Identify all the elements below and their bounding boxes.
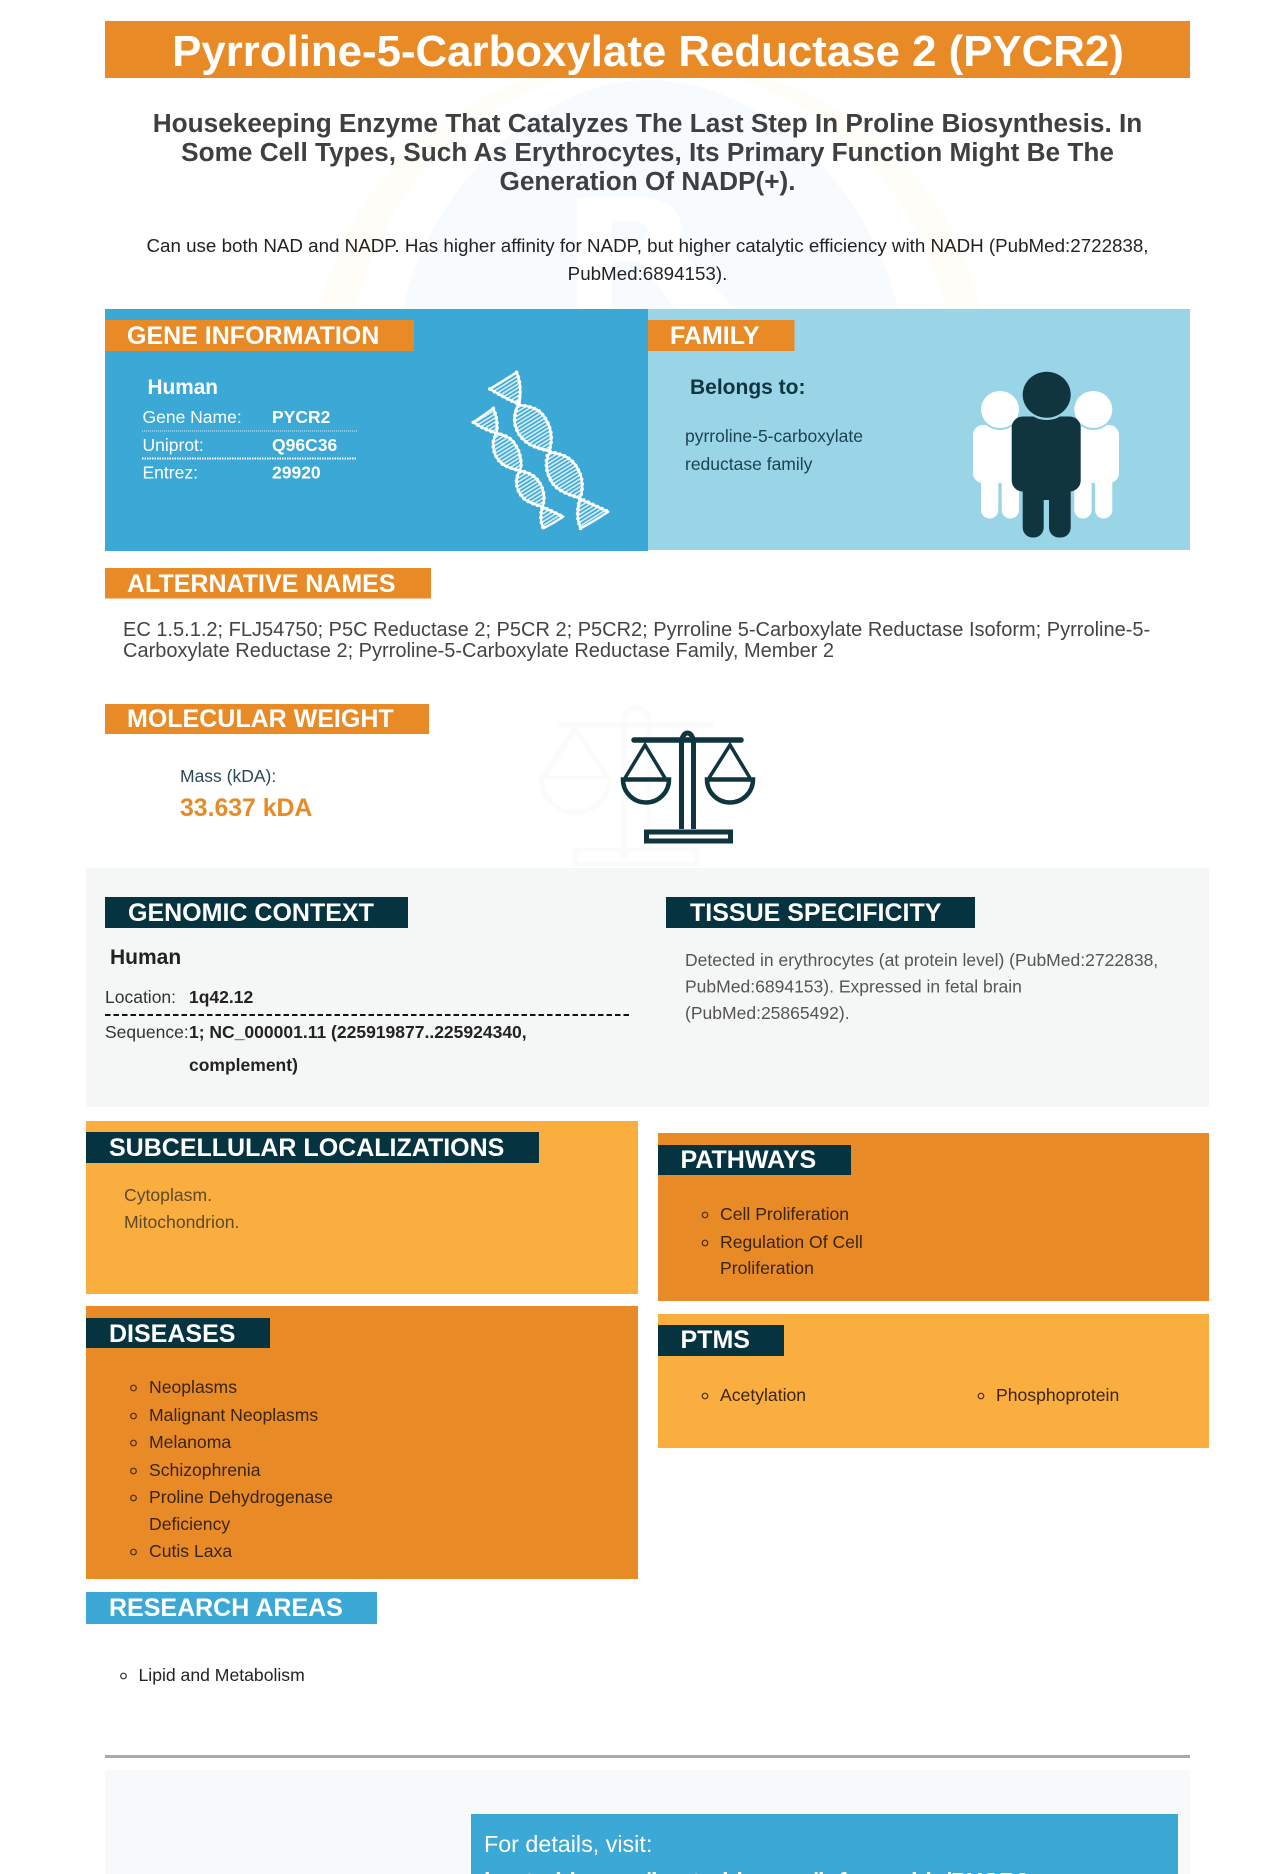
panel: diseases: Proline Dehydrogenase (149, 1487, 333, 1507)
panel: molecular weight: 33.637 kDA (180, 795, 312, 822)
panel: pathways: Regulation Of Cell (720, 1232, 863, 1252)
panel: family: pyrroline-5-carboxylate (685, 426, 863, 446)
panel: diseases: Deficiency (149, 1514, 230, 1534)
panel: alternative names: EC 1.5.1.2; FLJ54750; P5C Reductase 2; P5CR 2; P5CR2; Pyrroline 5-Carboxylate Reductase Isoform; Pyrroline-5- (123, 619, 1150, 641)
panel: diseases: Melanoma (149, 1432, 231, 1452)
panel: research areas: RESEARCH AREAS (109, 1594, 343, 1622)
panel: molecular weight (105, 704, 753, 864)
description: PubMed:6894153). (568, 263, 727, 284)
panel: subcellular localizations: Cytoplasm. (124, 1185, 212, 1205)
panel: molecular weight: Mass (kDA): (180, 766, 276, 786)
panel: pathways (658, 1133, 1209, 1301)
panel: pathways: Cell Proliferation (720, 1204, 849, 1224)
subtitle: Generation Of NADP(+). (499, 166, 796, 196)
panel: subcellular localizations: SUBCELLULAR LOCALIZATIONS (109, 1134, 504, 1162)
panel: family: Belongs to: (690, 376, 806, 399)
panel: genomic context and tissue specificity background (86, 868, 1209, 1107)
panel: gene information: Q96C36 (272, 435, 337, 455)
panel: ptms: Acetylation (720, 1385, 806, 1405)
panel: diseases: DISEASES (109, 1320, 235, 1348)
panel: ptms (658, 1314, 1209, 1448)
subtitle (153, 108, 1142, 196)
panel: ptms: Phosphoprotein (996, 1385, 1119, 1405)
tissue specificity: TISSUE SPECIFICITY (690, 899, 942, 927)
icon: people (973, 370, 1119, 538)
genomic context (105, 897, 630, 1075)
genomic context: 1q42.12 (189, 987, 253, 1007)
tissue specificity: Detected in erythrocytes (at protein level) (PubMed:2722838, (685, 950, 1158, 970)
panel: gene information: 29920 (272, 462, 321, 482)
panel: diseases: Malignant Neoplasms (149, 1405, 318, 1425)
panel: diseases: Neoplasms (149, 1377, 237, 1397)
genomic context: Human (110, 946, 181, 969)
panel: molecular weight: MOLECULAR WEIGHT (127, 705, 394, 733)
panel: ptms: PTMS (680, 1326, 750, 1354)
genomic context: 1; NC_000001.11 (225919877..225924340, (189, 1022, 527, 1042)
panel: subcellular localizations (86, 1121, 638, 1294)
title banner: Pyrroline-5-Carboxylate Reductase 2 (PYCR2) (172, 27, 1124, 76)
panel: family (648, 309, 1190, 550)
panel: alternative names: Carboxylate Reductase 2; Pyrroline-5-Carboxylate Reductase Family, Member 2 (123, 640, 834, 662)
genomic context: complement) (189, 1055, 298, 1075)
tissue specificity: (PubMed:25865492). (685, 1003, 850, 1023)
genomic context: Location: (105, 987, 176, 1007)
panel: diseases (86, 1306, 638, 1579)
panel: gene information: Uniprot: (142, 435, 204, 455)
genomic context: GENOMIC CONTEXT (128, 899, 374, 927)
panel: family: FAMILY (670, 322, 760, 350)
panel: footer (105, 1770, 1190, 1874)
description (146, 235, 1149, 284)
panel: family: reductase family (685, 454, 813, 474)
panel: diseases: Cutis Laxa (149, 1541, 232, 1561)
callout: details link: For details, visit: (484, 1831, 652, 1857)
panel: gene information: Entrez: (142, 462, 198, 482)
callout: details link (471, 1814, 1178, 1874)
panel: research areas (86, 1592, 377, 1685)
tissue specificity: PubMed:6894153). Expressed in fetal brain (685, 976, 1022, 996)
panel: alternative names: ALTERNATIVE NAMES (127, 570, 396, 598)
panel: gene information: Gene Name: (142, 407, 242, 427)
description: Can use both NAD and NADP. Has higher affinity for NADP, but higher catalytic efficiency with NADH (PubMed:2722838, (146, 235, 1149, 256)
panel: gene information: PYCR2 (272, 407, 331, 427)
icon: faded scale (541, 707, 714, 864)
subtitle: Housekeeping Enzyme That Catalyzes The Last Step In Proline Biosynthesis. In (153, 108, 1142, 138)
genomic context: Sequence: (105, 1022, 189, 1042)
icon: scale (623, 733, 753, 841)
panel: gene information: Human (148, 376, 218, 399)
watermark logo (320, 60, 981, 309)
panel: subcellular localizations: Mitochondrion. (124, 1212, 239, 1232)
tissue specificity (666, 897, 1158, 1023)
panel: pathways: Proliferation (720, 1258, 814, 1278)
panel: pathways: PATHWAYS (680, 1146, 816, 1174)
panel: diseases: Schizophrenia (149, 1460, 261, 1480)
panel: gene information: GENE INFORMATION (127, 322, 379, 350)
panel: gene information (105, 309, 648, 551)
panel: alternative names (105, 568, 1150, 662)
panel: research areas: Lipid and Metabolism (138, 1665, 305, 1685)
subtitle: Some Cell Types, Such As Erythrocytes, Its Primary Function Might Be The (181, 137, 1114, 167)
icon: dna (473, 372, 608, 528)
